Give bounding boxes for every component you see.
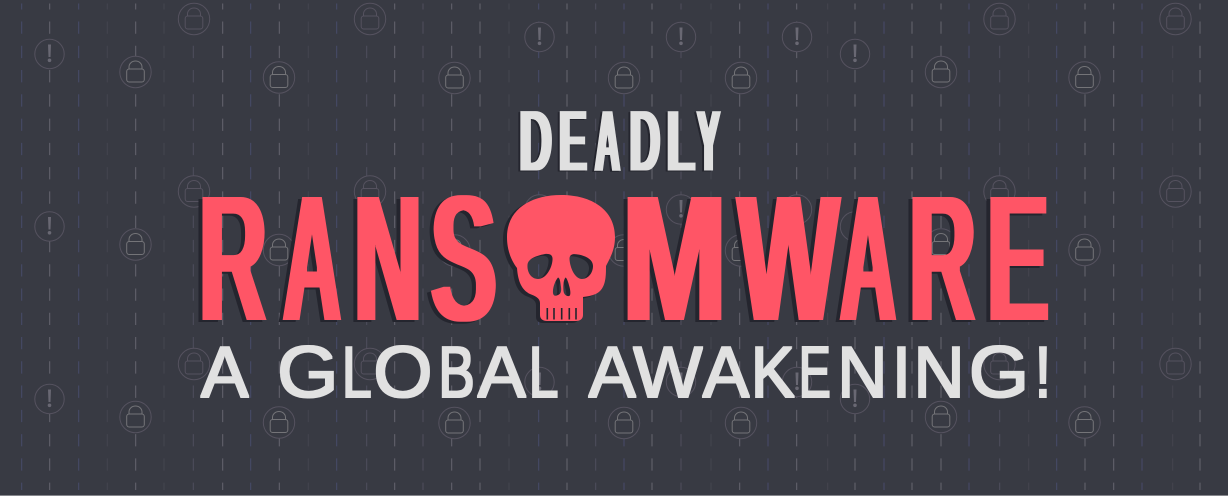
subtitle: A GLOBAL AWAKENING!: A xyxy=(703,333,750,413)
heading: DEADLY: E xyxy=(559,91,587,191)
title letters: RANS: N xyxy=(354,156,422,362)
title letters: MWARE: E xyxy=(987,155,1049,361)
title: RANSOMWARE with skull as the letter O xyxy=(199,155,1049,362)
subtitle: A GLOBAL AWAKENING!: E xyxy=(799,332,831,414)
heading: DEADLY: A xyxy=(595,93,620,191)
subtitle: A GLOBAL AWAKENING!: O xyxy=(373,332,433,413)
title letters: RANS: A xyxy=(283,156,341,362)
heading: DEADLY: Y xyxy=(697,93,720,191)
subtitle: A GLOBAL AWAKENING! xyxy=(201,331,1051,414)
heading: DEADLY: D xyxy=(630,91,660,191)
subtitle: A GLOBAL AWAKENING!: G xyxy=(969,331,1029,412)
subtitle: A GLOBAL AWAKENING!: K xyxy=(751,331,795,413)
title letters: RANS: R xyxy=(199,157,267,362)
title letters: MWARE xyxy=(622,155,1049,362)
subtitle: A GLOBAL AWAKENING!: N xyxy=(837,333,887,413)
subtitle: A GLOBAL AWAKENING!: N xyxy=(913,332,965,413)
title letters: MWARE: A xyxy=(840,156,896,362)
subtitle: A GLOBAL AWAKENING!: I xyxy=(892,333,911,413)
title letters: MWARE: W xyxy=(738,156,840,362)
title letters: MWARE: M xyxy=(622,156,727,362)
title letters: RANS xyxy=(199,156,497,362)
heading: DEADLY: L xyxy=(667,91,695,190)
title letters: MWARE: R xyxy=(909,155,976,361)
subtitle: A GLOBAL AWAKENING!: A xyxy=(589,332,636,413)
heading: DEADLY: D xyxy=(519,91,552,191)
subtitle: A GLOBAL AWAKENING!: L xyxy=(529,331,558,413)
subtitle: A GLOBAL AWAKENING!: W xyxy=(633,332,703,413)
subtitle: A GLOBAL AWAKENING!: A xyxy=(478,333,526,413)
subtitle: A GLOBAL AWAKENING!: G xyxy=(277,332,339,413)
subtitle: A GLOBAL AWAKENING!: A xyxy=(201,332,248,413)
heading: DEADLY xyxy=(519,91,720,191)
subtitle: A GLOBAL AWAKENING!: ! xyxy=(1035,333,1051,413)
title letters: RANS: S xyxy=(430,156,497,362)
subtitle: A GLOBAL AWAKENING!: B xyxy=(438,331,475,413)
subtitle: A GLOBAL AWAKENING!: L xyxy=(342,331,372,413)
icon: skull xyxy=(507,195,615,321)
